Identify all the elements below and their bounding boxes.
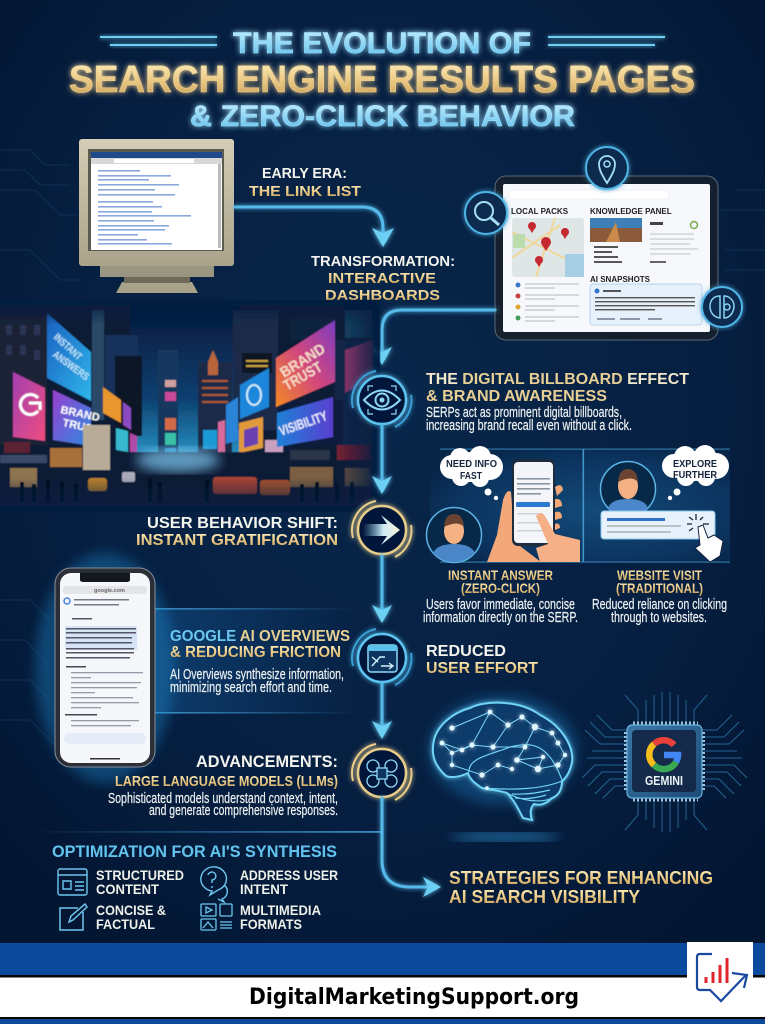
billboard: G logo xyxy=(13,372,45,441)
billboard: brand trust right xyxy=(276,320,335,407)
title line 2: SEARCH ENGINE RESULTS PAGES xyxy=(69,59,695,101)
heading: optimization for AI synthesis: OPTIMIZATION FOR AI'S SYNTHESIS xyxy=(52,842,337,861)
thought cloud left: FAST xyxy=(460,471,482,482)
block: digital billboard effect: increasing brand recall even without a click. xyxy=(426,417,632,434)
labels: website visit: WEBSITE VISIT xyxy=(617,567,702,583)
block: digital billboard effect: & BRAND AWARENESS xyxy=(426,388,607,405)
billboard: instant answers: INSTANT xyxy=(51,331,85,363)
block: advancements LLMs: ADVANCEMENTS: xyxy=(196,752,338,771)
block: advancements LLMs: Sophisticated models understand context, intent, xyxy=(108,790,338,807)
city billboard illustration xyxy=(0,300,380,512)
arrow: AI overviews to LLMs xyxy=(372,684,392,739)
local packs xyxy=(511,207,584,322)
icon: AI brain gear xyxy=(702,287,742,327)
arrow: monitor to transformation xyxy=(235,207,394,247)
AI snapshots: AI SNAPSHOTS xyxy=(590,275,651,284)
thought cloud right: FURTHER xyxy=(673,470,718,481)
heading: user behavior shift: USER BEHAVIOR SHIFT: xyxy=(147,515,338,532)
icon: magnifier xyxy=(465,192,507,234)
panel: zero-click vs website xyxy=(426,445,730,563)
item: concise and factual xyxy=(60,902,166,932)
person right xyxy=(600,462,656,516)
heading: transformation: DASHBOARDS xyxy=(325,287,440,304)
phone with AI overview xyxy=(35,553,175,783)
illustration: neural brain xyxy=(428,695,578,841)
title xyxy=(69,27,695,133)
icon: location pin xyxy=(586,147,628,189)
billboard: brand trust right: BRAND xyxy=(277,340,329,381)
arrow: billboard to behaviour xyxy=(372,426,392,494)
item: address user intent: INTENT xyxy=(240,881,288,897)
illustration: gemini chip: GEMINI xyxy=(645,773,683,788)
thought cloud left: NEED INFO xyxy=(446,459,497,470)
heading: early era: EARLY ERA: xyxy=(262,165,347,182)
block: google AI overviews: minimizing search effort and time. xyxy=(170,679,332,696)
connector band around AI overviews xyxy=(155,608,355,714)
thought cloud right xyxy=(662,445,729,500)
title line 1: THE EVOLUTION OF xyxy=(233,27,531,60)
billboard: instant answers: ANSWERS xyxy=(50,349,91,383)
local packs: LOCAL PACKS xyxy=(511,207,569,216)
block: google AI overviews: GOOGLE AI OVERVIEWS xyxy=(170,628,350,645)
item: structured content: STRUCTURED xyxy=(96,867,184,883)
item: concise and factual: FACTUAL xyxy=(96,916,155,932)
heading: reduced user effort xyxy=(426,643,538,677)
arrow: tablet to billboard step xyxy=(372,310,495,365)
title ornament lines xyxy=(100,37,665,45)
footer logo xyxy=(687,942,753,1001)
item: address user intent: ADDRESS USER xyxy=(240,867,338,883)
item: structured content xyxy=(58,867,184,897)
Google G logo xyxy=(649,740,678,769)
block: digital billboard effect xyxy=(426,371,689,434)
block: google AI overviews: AI Overviews synthesize information, xyxy=(170,666,344,683)
block: digital billboard effect: SERPs act as prominent digital billboards, xyxy=(426,404,622,421)
billboard: round logo xyxy=(240,368,269,419)
illustration: gemini chip xyxy=(582,692,747,832)
heading: early era: THE LINK LIST xyxy=(249,183,361,200)
labels: instant answer xyxy=(423,567,578,626)
street level xyxy=(0,442,372,505)
heading: reduced user effort: REDUCED xyxy=(426,643,506,660)
labels: instant answer: Users favor immediate, concise xyxy=(426,596,575,613)
knowledge panel: KNOWLEDGE PANEL xyxy=(590,207,672,216)
billboard: instant answers xyxy=(47,313,91,401)
item: concise and factual: CONCISE & xyxy=(96,902,166,918)
icon: browser shuffle node xyxy=(352,629,411,685)
billboard: visibility: VISIBILITY xyxy=(277,407,330,439)
icon: cursor hand xyxy=(687,514,723,562)
person left xyxy=(426,508,482,562)
small billboards xyxy=(83,340,373,470)
search result card xyxy=(601,511,715,539)
footer xyxy=(0,942,765,1024)
arrow: behaviour to AI overviews xyxy=(372,556,392,623)
item: multimedia formats: MULTIMEDIA xyxy=(240,902,321,918)
title line 3: & ZERO-CLICK BEHAVIOR xyxy=(190,100,575,133)
heading: strategies xyxy=(449,868,713,907)
icon: chip brain node xyxy=(352,744,411,800)
icon: eye step node xyxy=(352,371,411,427)
item: address user intent xyxy=(201,867,338,902)
item: multimedia formats xyxy=(201,902,321,932)
billboard: brand trust left: TRUST xyxy=(61,417,100,437)
heading: strategies: STRATEGIES FOR ENHANCING xyxy=(449,868,713,888)
labels: instant answer: INSTANT ANSWER xyxy=(448,567,553,583)
block: advancements LLMs: and generate comprehensive responses. xyxy=(149,802,338,819)
icon: retro monitor xyxy=(79,139,234,293)
block: google AI overviews: & REDUCING FRICTION xyxy=(170,644,341,661)
heading: user behavior shift xyxy=(136,515,338,549)
heading: reduced user effort: USER EFFORT xyxy=(426,660,538,677)
knowledge panel xyxy=(590,207,698,263)
block: advancements LLMs: LARGE LANGUAGE MODELS (LLMs) xyxy=(115,773,338,790)
footer site name: DigitalMarketingSupport.org xyxy=(249,985,579,1010)
heading: transformation: TRANSFORMATION: xyxy=(311,253,455,270)
block: digital billboard effect: THE DIGITAL BILLBOARD EFFECT xyxy=(426,371,689,388)
labels: website visit: (TRADITIONAL) xyxy=(616,580,703,596)
heading: strategies: AI SEARCH VISIBILITY xyxy=(449,887,640,907)
labels: website visit xyxy=(592,567,727,626)
billboard: visibility xyxy=(277,397,333,447)
phone with AI overview: google.com xyxy=(94,588,125,594)
tablet dashboard xyxy=(495,176,718,340)
icon: gold arrow node xyxy=(352,501,411,557)
heading: transformation: INTERACTIVE xyxy=(328,270,436,287)
labels: instant answer: information directly on the SERP. xyxy=(423,609,578,626)
thought cloud right: EXPLORE xyxy=(673,459,717,470)
labels: instant answer: (ZERO-CLICK) xyxy=(461,580,540,596)
phone in hand xyxy=(487,459,580,562)
billboard: brand trust right: TRUST xyxy=(280,359,325,394)
labels: website visit: through to websites. xyxy=(611,609,707,626)
item: multimedia formats: FORMATS xyxy=(240,916,302,932)
billboard: brand trust left: BRAND xyxy=(59,404,101,424)
thought cloud left xyxy=(440,446,503,500)
item: structured content: CONTENT xyxy=(96,881,159,897)
billboard: brand trust left xyxy=(53,390,101,446)
heading: early era xyxy=(249,165,361,200)
AI snapshots xyxy=(590,275,702,325)
connector and arrow to strategies xyxy=(25,798,441,897)
block: google AI overviews xyxy=(170,628,350,696)
heading: user behavior shift: INSTANT GRATIFICATION xyxy=(136,532,338,549)
heading: transformation xyxy=(311,253,455,304)
block: advancements LLMs xyxy=(108,752,338,819)
